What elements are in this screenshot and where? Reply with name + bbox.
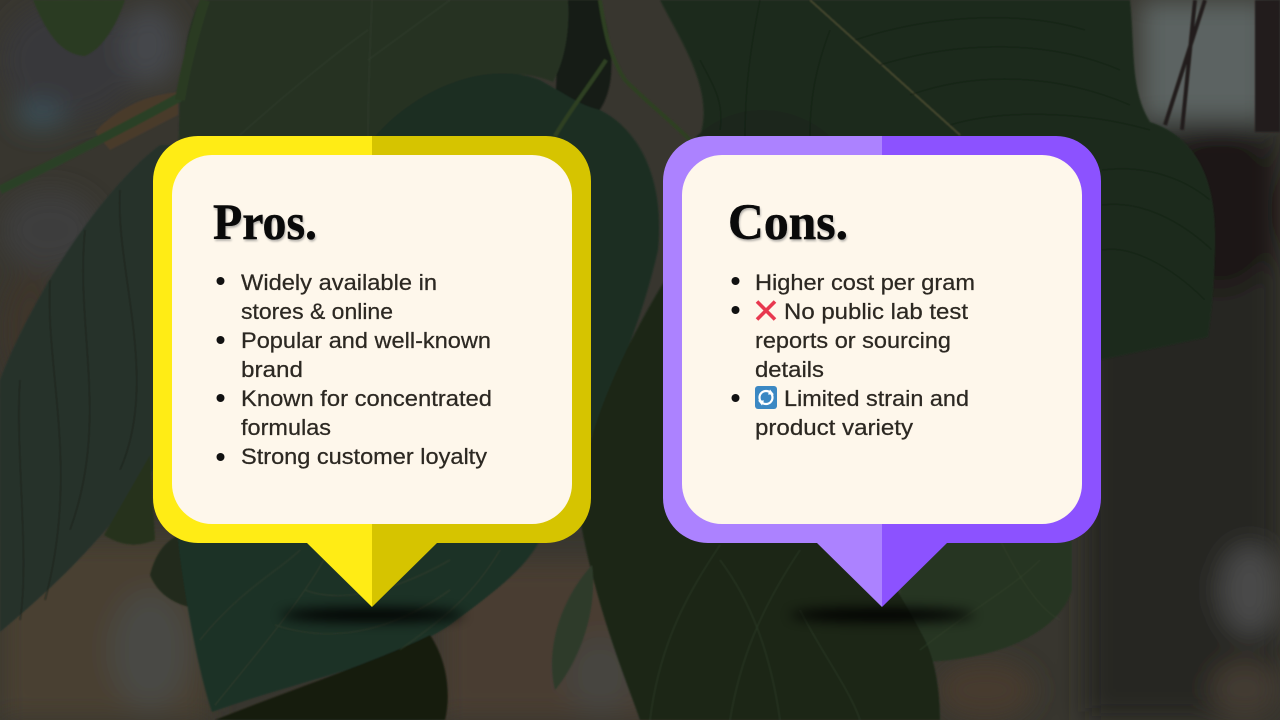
- callout frame: [663, 136, 1101, 607]
- list: cons: details: [755, 357, 824, 382]
- brown leaf: [95, 92, 178, 150]
- left leaf: [0, 145, 240, 632]
- lower centre leaf: [580, 280, 940, 720]
- list: pros: Widely available in: [241, 270, 437, 295]
- small rear leaf: [150, 535, 215, 610]
- stem top: [555, 0, 690, 140]
- list: pros: [216, 270, 492, 469]
- dark rear leaf: [555, 0, 611, 125]
- list: pros: Known for concentrated: [241, 386, 492, 411]
- icon: red cross: [757, 302, 775, 320]
- tail shadow: [790, 608, 974, 622]
- icon: refresh: [755, 386, 777, 409]
- right lower leaf: [900, 480, 1072, 662]
- list: pros: stores & online: [241, 299, 393, 324]
- heading: cons: Cons.: [729, 197, 849, 253]
- heading: pros: Pros.: [214, 197, 318, 253]
- heading: pros: Pros.: [213, 195, 317, 251]
- bud leaf: [695, 110, 830, 138]
- bottom dark leaf: [215, 635, 448, 720]
- panel: cons: [663, 136, 1101, 622]
- centre leaf: [375, 73, 659, 460]
- list: pros: Strong customer loyalty: [241, 444, 488, 469]
- list: pros: formulas: [241, 415, 331, 440]
- list: cons: reports or sourcing: [755, 328, 951, 353]
- panel: pros: [153, 136, 591, 622]
- sky stems: [1165, 0, 1278, 130]
- list: cons: product variety: [755, 415, 914, 440]
- list: pros: Popular and well-known: [241, 328, 491, 353]
- top left leaf: [33, 0, 125, 56]
- top centre leaf: [179, 0, 568, 220]
- midrib right: [810, 0, 960, 135]
- small green leaf: [104, 455, 155, 545]
- list: cons: [732, 270, 975, 440]
- narrow leaf: [552, 565, 593, 690]
- stem centre-left: [180, 0, 205, 100]
- top right leaf: [660, 0, 1215, 360]
- list: cons: Limited strain and: [784, 386, 969, 411]
- callout frame: [153, 136, 591, 607]
- list: pros: brand: [241, 357, 303, 382]
- leaf veins light: [200, 0, 1060, 720]
- list: cons: No public lab test: [784, 299, 969, 324]
- bottom leaf: [178, 480, 570, 712]
- stem left: [0, 97, 180, 190]
- tail shadow: [280, 608, 464, 622]
- heading: cons: Cons.: [728, 195, 848, 251]
- list: cons: Higher cost per gram: [755, 270, 975, 295]
